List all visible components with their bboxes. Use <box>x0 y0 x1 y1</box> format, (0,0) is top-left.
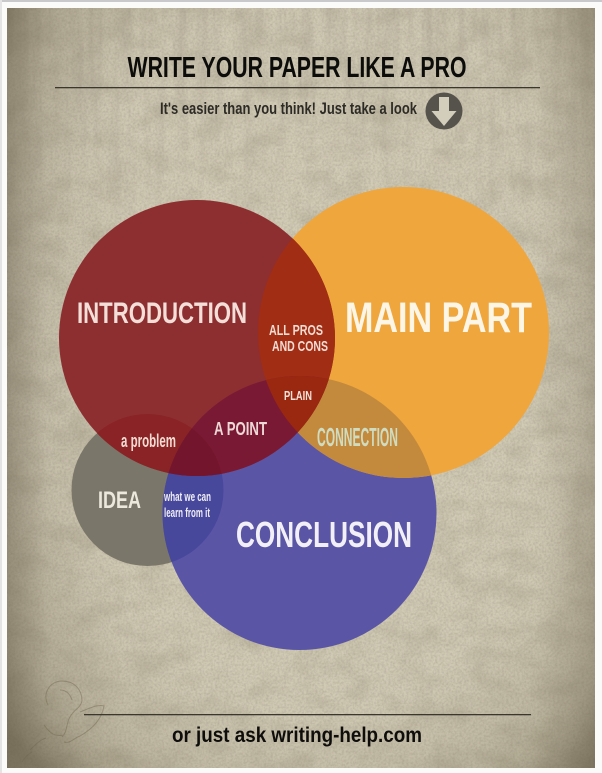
circle: main part <box>258 187 549 478</box>
label: idea: IDEA <box>98 487 141 514</box>
label: conclusion: CONCLUSION <box>236 514 412 555</box>
footer rule <box>84 714 531 715</box>
overlap: main part and conclusion <box>298 379 432 478</box>
circle: idea <box>72 414 224 566</box>
label: what we can learn from it <box>163 490 211 520</box>
label: what we can learn from it: what we can <box>163 490 211 504</box>
label: main part: MAIN PART <box>345 294 532 342</box>
overlap: introduction, main part and conclusion <box>266 376 329 432</box>
label: plain: PLAIN <box>284 389 312 403</box>
overlap: introduction and conclusion <box>168 376 329 476</box>
label: all pros and cons <box>269 322 328 355</box>
label: a problem: a problem <box>121 431 176 451</box>
overlap: introduction and idea <box>97 414 222 476</box>
circle: introduction <box>59 200 335 476</box>
title: WRITE YOUR PAPER LIKE A PRO <box>128 52 466 84</box>
label: all pros and cons: ALL PROS <box>269 322 323 339</box>
text: CONNECTION <box>317 422 398 452</box>
subtitle: It's easier than you think! Just take a look <box>160 100 418 118</box>
overlap: introduction and main part <box>258 238 335 432</box>
faded bird sketch <box>22 681 104 762</box>
label: what we can learn from it: learn from it <box>164 506 211 520</box>
venn diagram <box>59 187 549 650</box>
title rule <box>55 87 540 88</box>
circle: conclusion <box>162 376 436 650</box>
label: a point: A POINT <box>214 419 267 439</box>
label: introduction: INTRODUCTION <box>77 297 247 330</box>
footer text: or just ask writing-help.com <box>172 724 422 747</box>
overlap: introduction, idea and conclusion <box>168 428 222 476</box>
label: all pros and cons: AND CONS <box>272 338 328 355</box>
icon: down arrow <box>426 92 462 130</box>
overlap: idea and conclusion <box>162 473 224 562</box>
